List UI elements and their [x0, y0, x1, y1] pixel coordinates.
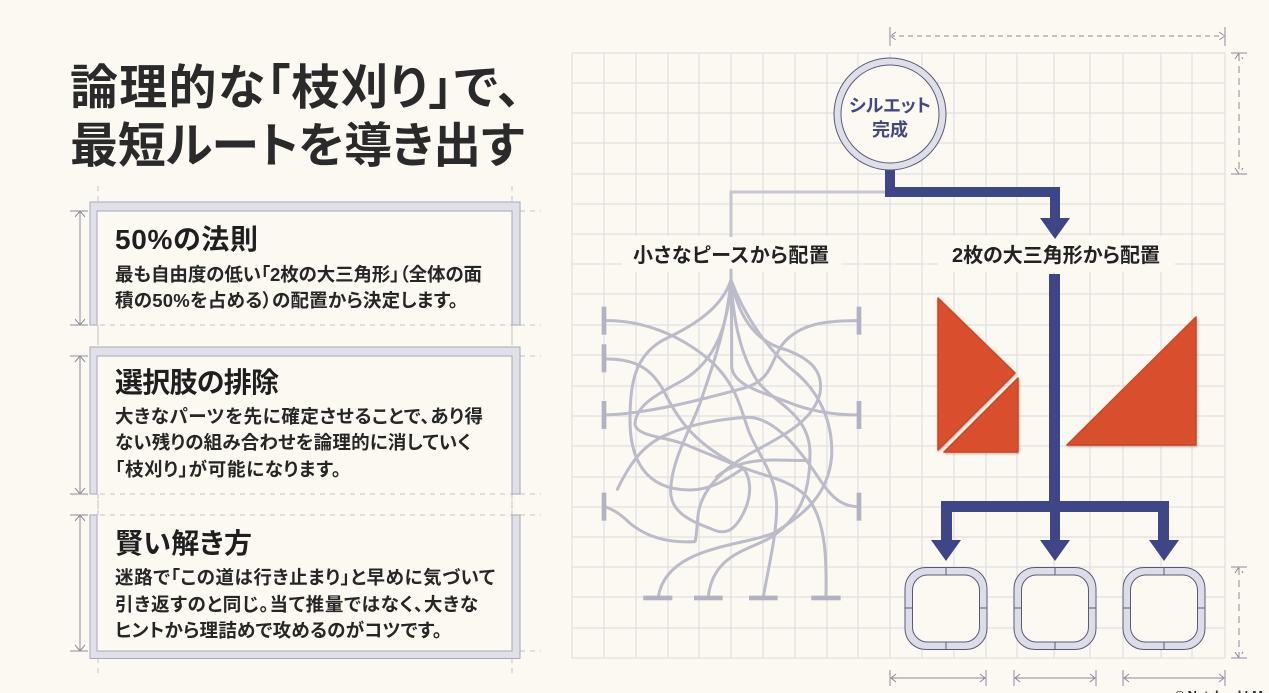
dimension ticks: lower right: [1231, 567, 1247, 658]
panel: 賢い解き方: [70, 500, 541, 676]
text: 選択肢の排除 description: 「枝刈り」が可能になります。: [115, 459, 341, 480]
branch label backgrounds: [622, 236, 1175, 272]
text: 50%の法則 description: 積の50%を占める）の配置から決定します。: [115, 290, 458, 311]
dimension arrow: upper right: [1235, 53, 1243, 174]
text: 50%の法則 description: [115, 264, 482, 311]
icon: large triangles left: [938, 298, 1018, 452]
dimension ticks: top: [890, 27, 1225, 46]
text: 賢い解き方 description: ヒントから理詰めで攻めるのがコツです。: [115, 620, 442, 641]
result: square 2: [1014, 568, 1096, 650]
connector: gray branch: [731, 192, 885, 237]
heading: 賢い解き方: 賢い解き方: [115, 528, 252, 559]
text: 選択肢の排除 description: [115, 406, 483, 480]
icon: large triangle right: [1067, 317, 1196, 445]
text: 50%の法則 description: 最も自由度の低い「2枚の大三角形」（全体の面: [115, 264, 482, 285]
text: 選択肢の排除 description: ない残りの組み合わせを論理的に消していく: [115, 432, 471, 453]
chart panel: grid: [572, 53, 1225, 658]
result: square 3: [1123, 568, 1205, 650]
dimension arrow: top: [890, 32, 1225, 40]
node: シルエット完成: シルエット: [849, 96, 931, 116]
panel: 50%の法則: [70, 186, 541, 345]
chart: tangled paths from small pieces: [602, 270, 861, 600]
heading: 50%の法則: 50%の法則: [115, 224, 258, 255]
arrow: navy trunk with three branches: [931, 274, 1179, 561]
heading: 選択肢の排除: 選択肢の排除: [115, 367, 279, 398]
panel: 選択肢の排除: [70, 330, 541, 512]
result: square 1: [905, 568, 987, 650]
dimension ticks: upper right: [1231, 53, 1247, 174]
title: [70, 62, 524, 173]
title: 論理的な「枝刈り」で、: [70, 62, 521, 115]
text: 賢い解き方 description: 迷路で「この道は行き止まり」と早めに気づいて: [115, 567, 495, 588]
label: 2枚の大三角形から配置: 2枚の大三角形から配置: [952, 243, 1160, 267]
text: 賢い解き方 description: 引き返すのと同じ。当て推量ではなく、大きな: [115, 594, 478, 615]
arrow: navy path to right branch: [885, 168, 1070, 239]
node: シルエット完成: [834, 58, 946, 170]
node: シルエット完成: 完成: [872, 119, 908, 140]
dimension arrows: bottom: [890, 670, 1225, 686]
dimension arrow: lower right: [1235, 567, 1243, 658]
text: 賢い解き方 description: [115, 567, 495, 641]
text: 選択肢の排除 description: 大きなパーツを先に確定させることで、あり得: [115, 406, 483, 427]
title: 最短ルートを導き出す: [70, 120, 524, 173]
label: 小さなピースから配置: 小さなピースから配置: [633, 244, 829, 267]
